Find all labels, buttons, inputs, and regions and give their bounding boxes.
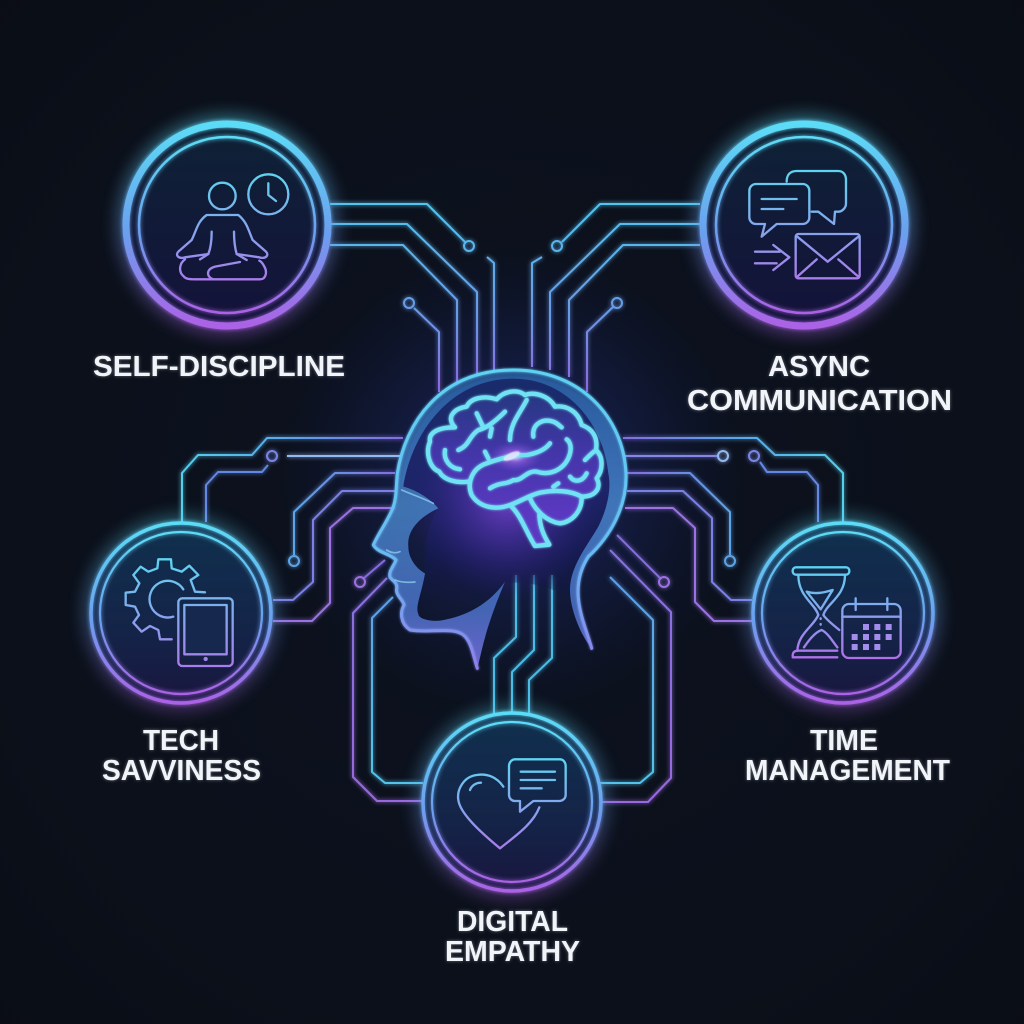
circuit lines: top-left xyxy=(330,204,494,392)
brain outline xyxy=(428,391,602,546)
rings xyxy=(753,523,933,703)
label line: savviness: SAVVINESS xyxy=(102,755,261,787)
ring disc xyxy=(423,713,601,891)
brain spark xyxy=(503,450,521,462)
head interior xyxy=(402,377,623,621)
node: async communication xyxy=(702,123,906,327)
back of head band xyxy=(513,370,626,648)
head outline xyxy=(373,370,626,668)
icon: meditating person with clock xyxy=(177,174,288,279)
label: digital empathy xyxy=(445,906,580,968)
label line: communication: COMMUNICATION xyxy=(687,385,952,417)
label line: time: TIME xyxy=(810,725,878,757)
circuit lines: left xyxy=(182,438,403,621)
label: tech savviness xyxy=(102,725,261,787)
icon: chat bubbles and envelope xyxy=(749,171,860,278)
circuit lines: right xyxy=(623,438,843,621)
ring halo xyxy=(702,123,906,327)
node: tech savviness xyxy=(91,523,271,703)
circuit lines: lower right xyxy=(600,535,671,802)
brain glow xyxy=(488,442,542,472)
label: async communication xyxy=(687,351,952,417)
face highlights xyxy=(387,490,433,582)
ring disc xyxy=(91,523,271,703)
ring disc xyxy=(753,523,933,703)
central head with brain xyxy=(373,370,626,668)
rings xyxy=(423,713,601,891)
icon: heart and speech bubble xyxy=(458,759,566,848)
label line: management: MANAGEMENT xyxy=(745,755,950,787)
icon: hourglass and calendar xyxy=(793,567,901,658)
label line: async: ASYNC xyxy=(768,351,870,383)
circuit lines: lower left xyxy=(353,560,425,801)
interior purple glow xyxy=(410,403,603,597)
label: self-discipline: SELF-DISCIPLINE xyxy=(93,351,345,383)
rings xyxy=(91,523,271,703)
label line: digital: DIGITAL xyxy=(457,906,568,938)
icon: gear and tablet xyxy=(126,559,233,666)
ring disc xyxy=(125,123,329,327)
node: digital empathy xyxy=(423,713,601,891)
rings xyxy=(126,124,328,326)
circuit lines: bottom centre xyxy=(494,575,552,714)
ring halo xyxy=(753,523,933,703)
brain fill xyxy=(428,391,602,546)
node: time management xyxy=(753,523,933,703)
ring halo xyxy=(125,123,329,327)
ring halo xyxy=(91,523,271,703)
label line: empathy: EMPATHY xyxy=(445,936,580,968)
label line: tech: TECH xyxy=(143,725,219,757)
ring halo xyxy=(423,713,601,891)
ring disc xyxy=(702,123,906,327)
face and jaw band xyxy=(373,370,513,668)
node: self-discipline xyxy=(125,123,329,327)
label: time management xyxy=(745,725,950,787)
central glow xyxy=(282,250,742,710)
circuit lines: top-right xyxy=(532,204,700,392)
rings xyxy=(703,124,905,326)
